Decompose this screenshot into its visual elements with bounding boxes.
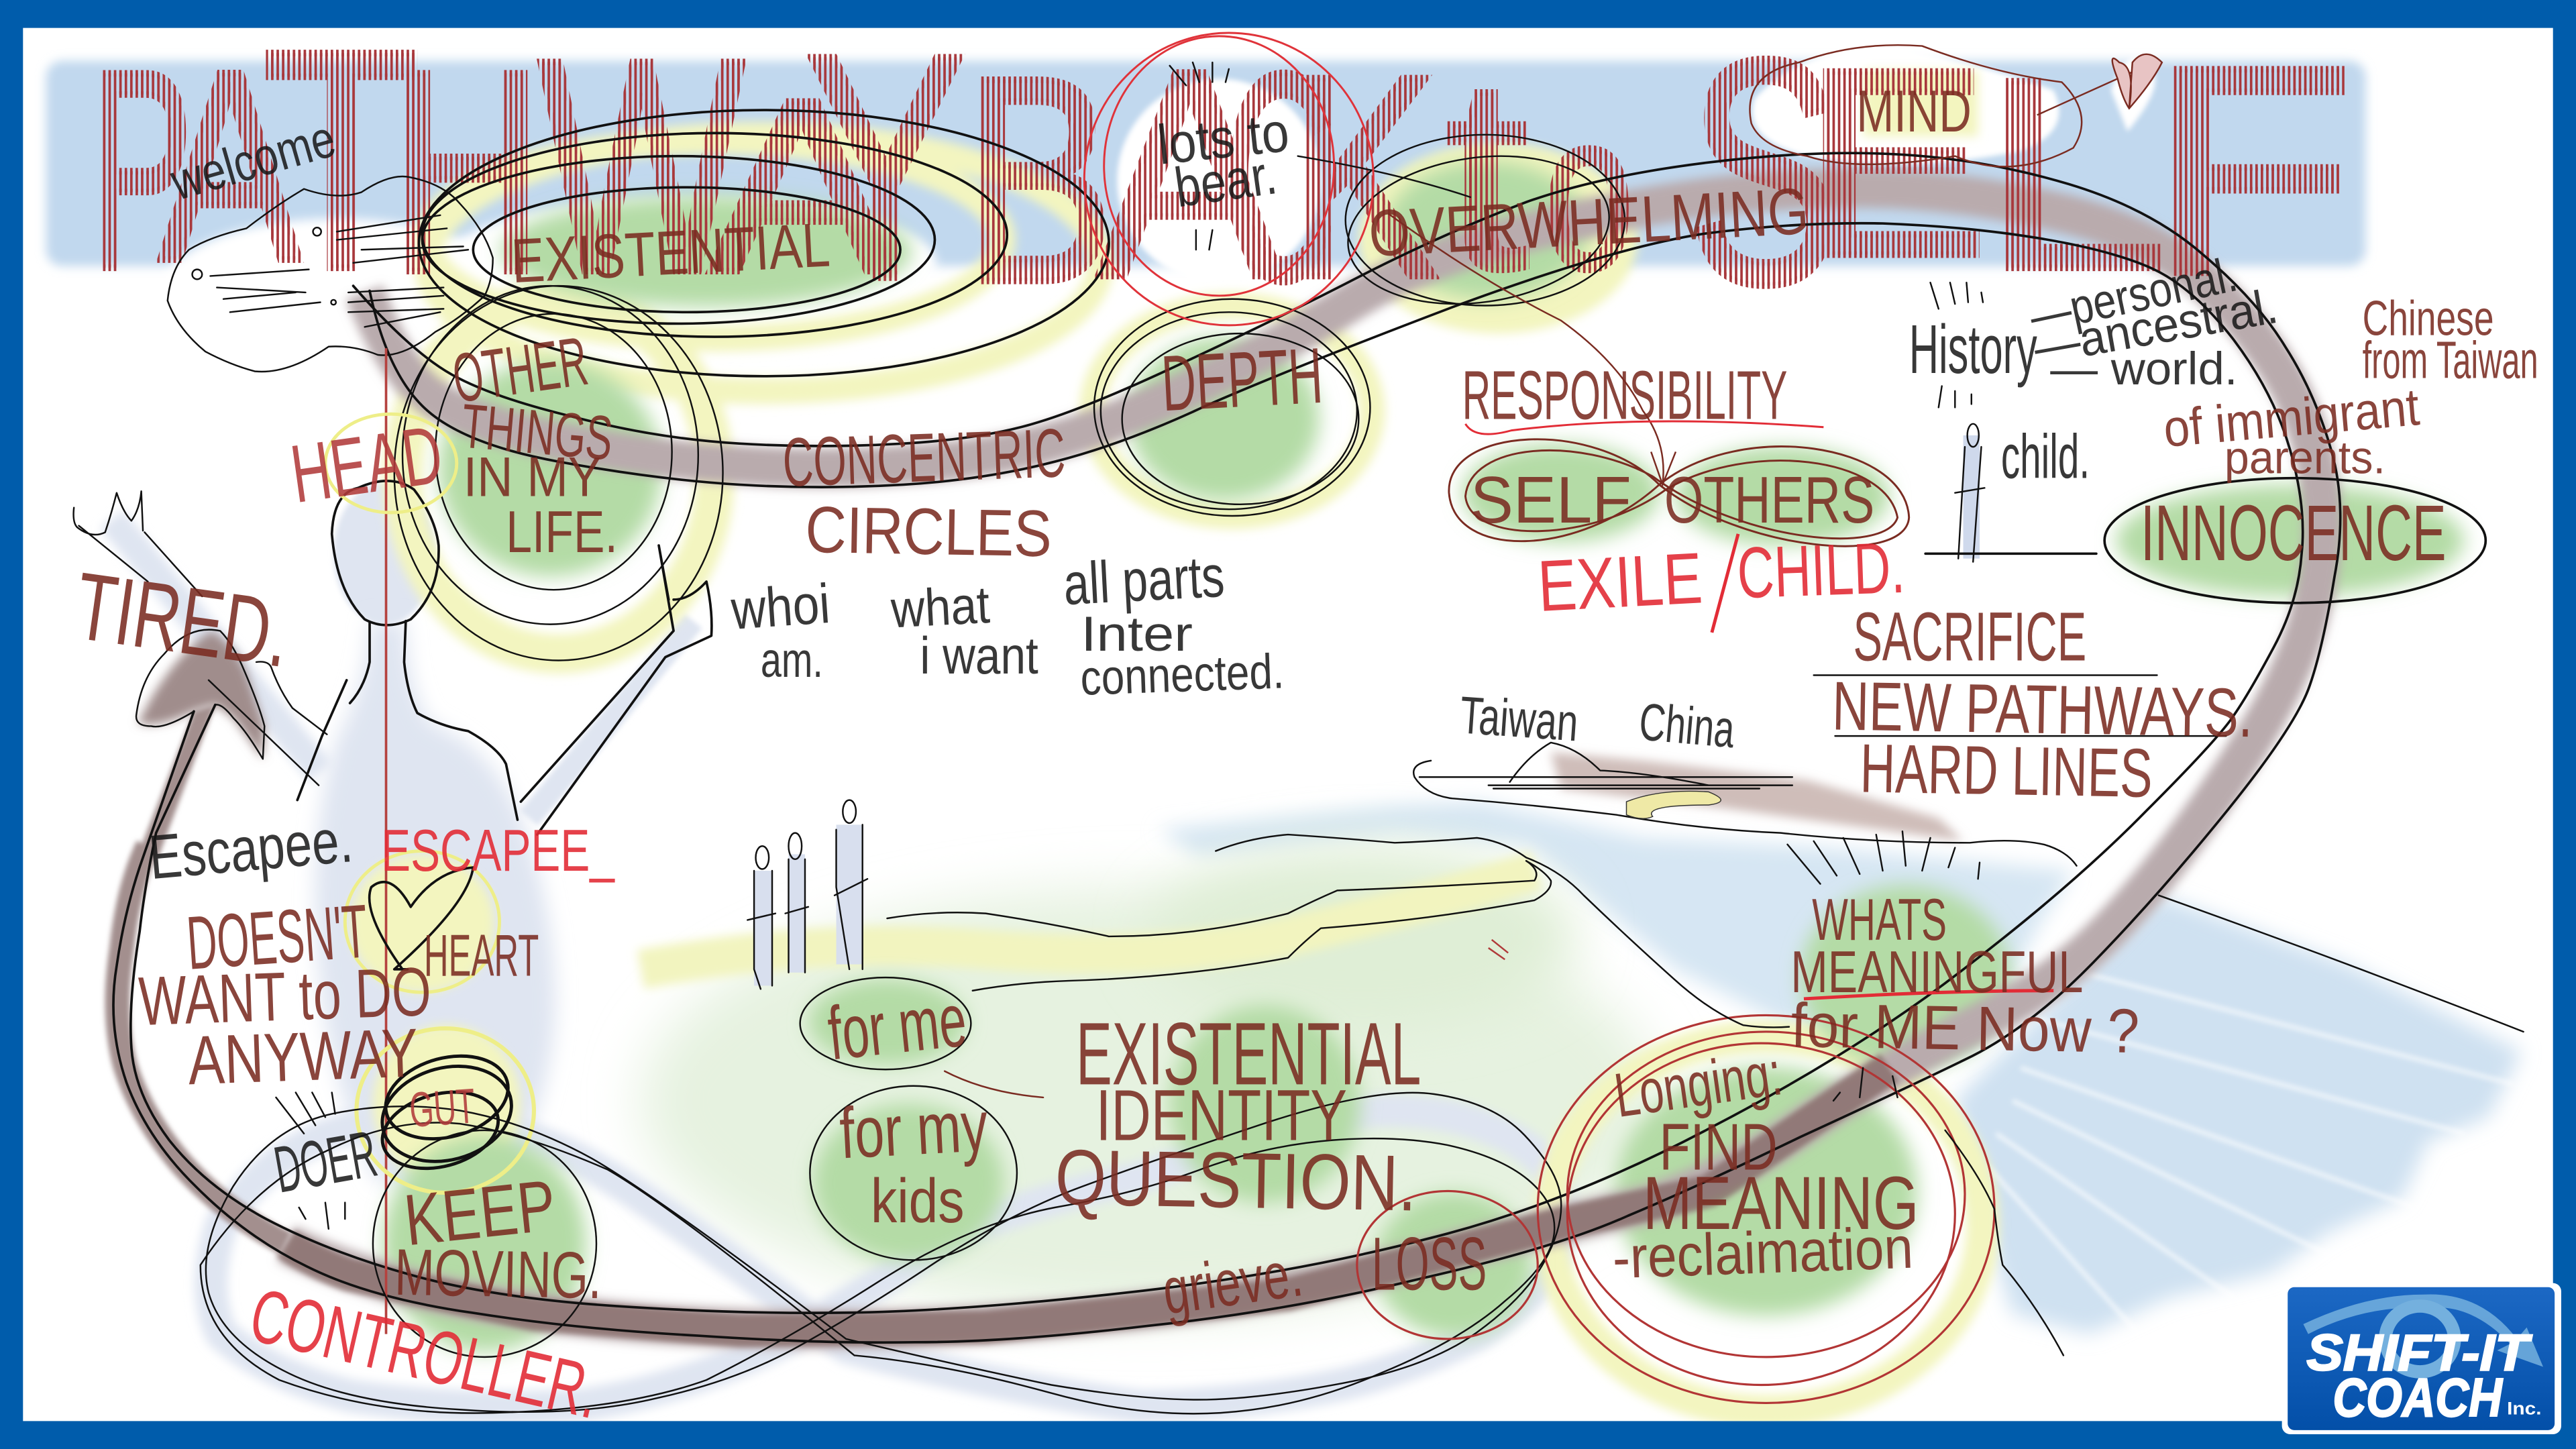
text: escapee black: Escapee. bbox=[146, 805, 356, 892]
text: self others: OTHERS bbox=[1664, 463, 1874, 537]
text: longing find meaning reclamation: FIND bbox=[1659, 1110, 1778, 1184]
title: C bbox=[1224, 12, 1336, 342]
text: overwhelming: OVERWHELMING bbox=[1367, 174, 1811, 270]
text: what i want bbox=[889, 575, 1038, 685]
overwhelming circles bbox=[1298, 135, 1625, 320]
text: exile child: CHILD. bbox=[1736, 527, 1906, 613]
text: responsibility: RESPONSIBILITY bbox=[1462, 356, 1787, 433]
text: existential identity question bbox=[1055, 1004, 1421, 1228]
text: of immigrant parents: of immigrant bbox=[2161, 377, 2422, 458]
text: concentric circles bbox=[782, 414, 1067, 570]
text: history: —ancestral. bbox=[2029, 278, 2282, 375]
title: B bbox=[963, 17, 1114, 343]
text: chinese from Taiwan: Chinese bbox=[2363, 290, 2494, 346]
text: loss: LOSS bbox=[1372, 1221, 1487, 1305]
text: whats meaningful for me now: WHATS bbox=[1812, 886, 1947, 953]
text: history: — world. bbox=[2050, 343, 2238, 394]
logo: Shift-It Coach bbox=[2282, 1283, 2561, 1434]
text: for my kids: kids bbox=[871, 1166, 965, 1236]
Taiwan and China sketch: China bbox=[1637, 692, 1737, 759]
head ring bbox=[325, 414, 457, 513]
text: other things in my life: THINGS bbox=[459, 390, 615, 474]
text: depth: DEPTH bbox=[1159, 331, 1325, 427]
text: longing find meaning reclamation: MEANING bbox=[1643, 1161, 1919, 1245]
text: doer: DOER bbox=[269, 1116, 382, 1207]
text: exile child bbox=[1536, 527, 1906, 633]
title: L bbox=[1980, 22, 2169, 325]
title: W bbox=[539, 0, 746, 336]
text: whats meaningful for me now: MEANINGFUL bbox=[1790, 938, 2083, 1005]
text: doesn't want to do anyway bbox=[138, 888, 433, 1099]
red find meaning rings bbox=[1357, 1015, 1994, 1403]
text: who i am: am. bbox=[761, 632, 823, 688]
title: A bbox=[1097, 9, 1283, 339]
text: keep moving bbox=[394, 1164, 602, 1312]
text: history bbox=[1909, 246, 2282, 407]
text: history: History bbox=[1909, 311, 2037, 388]
text: sacrifice new pathways hard lines: SACRIFICE bbox=[1853, 598, 2086, 675]
logo: Shift-It Coach: Inc. bbox=[2507, 1399, 2542, 1419]
text: all parts inter connected: connected. bbox=[1079, 643, 1285, 706]
text: other things in my life bbox=[448, 322, 618, 565]
arrow head bbox=[136, 630, 319, 786]
title bbox=[91, 0, 2354, 351]
text: all parts inter connected bbox=[1062, 543, 1285, 706]
landscape land wash bbox=[641, 846, 1659, 1314]
text: chinese from Taiwan bbox=[2363, 290, 2538, 389]
text: child: child. bbox=[2001, 422, 2090, 492]
text: longing find meaning reclamation: -reclaimation bbox=[1611, 1214, 1914, 1291]
title sky band bbox=[46, 48, 2366, 356]
text: whats meaningful for me now bbox=[1790, 886, 2140, 1066]
meaningful red underline bbox=[1804, 991, 2053, 999]
yellow filled spots bbox=[350, 70, 1978, 1183]
text: history: —personal. bbox=[2025, 246, 2242, 344]
text: for my kids bbox=[838, 1085, 989, 1236]
title: F bbox=[2149, 6, 2354, 336]
text: existential identity question: QUESTION. bbox=[1055, 1133, 1417, 1228]
text: what i want: what bbox=[889, 575, 991, 639]
depth circles bbox=[1094, 299, 1370, 516]
welcome cloud bbox=[164, 109, 493, 372]
logo: Shift-It Coach: SHIFT-IT bbox=[2306, 1324, 2532, 1381]
landscape coast and river lines bbox=[887, 761, 2524, 1355]
text: all parts inter connected: all parts bbox=[1062, 543, 1226, 617]
text: of immigrant parents bbox=[2161, 377, 2422, 483]
mind cloud and heart bbox=[1750, 45, 2162, 166]
text: tired: TIRED. bbox=[69, 552, 296, 688]
title: E bbox=[1804, 15, 1988, 312]
text: concentric circles: CONCENTRIC bbox=[782, 414, 1067, 501]
text: existential identity question: EXISTENTIAL bbox=[1076, 1004, 1421, 1104]
text: exile child: EXILE bbox=[1536, 537, 1704, 627]
text: all parts inter connected: Inter bbox=[1081, 606, 1193, 661]
text: of immigrant parents: parents. bbox=[2224, 431, 2385, 483]
text: other things in my life: OTHER bbox=[448, 322, 592, 417]
self others infinity bbox=[1449, 439, 1909, 546]
lavender infinity band bbox=[211, 1110, 1560, 1407]
child figure bbox=[1925, 424, 2096, 562]
pathway edge lines bbox=[113, 153, 2341, 1342]
water areas bbox=[1159, 802, 2522, 1334]
logo: Shift-It Coach: COACH bbox=[2333, 1368, 2503, 1428]
text: who i am: whoi bbox=[729, 572, 832, 641]
text: sacrifice new pathways hard lines bbox=[1831, 598, 2253, 812]
three people bbox=[747, 800, 867, 989]
pathway band bbox=[117, 189, 2322, 1331]
text: gut: GUT bbox=[408, 1077, 477, 1138]
text: doer bbox=[269, 1093, 382, 1229]
meaningful rays bbox=[1787, 831, 1980, 1101]
text: for me: for me bbox=[824, 977, 970, 1075]
text: existential: EXISTENTIAL bbox=[510, 209, 832, 296]
infinity outline bbox=[201, 1093, 1561, 1413]
text: concentric circles: CIRCLES bbox=[805, 492, 1053, 570]
text: keep moving: KEEP bbox=[400, 1164, 559, 1260]
title: A bbox=[160, 14, 302, 317]
mind cloud and heart: MIND bbox=[1856, 78, 1972, 144]
Taiwan and China sketch bbox=[1419, 685, 1792, 818]
text: who i am bbox=[729, 572, 832, 688]
text: doesn't want to do anyway: ANYWAY bbox=[186, 1014, 419, 1099]
green blobs bbox=[383, 161, 2464, 1352]
title: H bbox=[391, 11, 542, 332]
title: S bbox=[1689, 0, 1840, 351]
yellow halos bbox=[402, 135, 1983, 1411]
title: o bbox=[1544, 68, 1633, 315]
lots to bear text: bear. bbox=[1171, 143, 1281, 219]
welcome cloud: welcome bbox=[164, 109, 341, 211]
raised hand lines bbox=[74, 491, 202, 596]
text: sacrifice new pathways hard lines: HARD LINES bbox=[1860, 729, 2153, 812]
gut scribble and ring bbox=[356, 1028, 534, 1193]
text: other things in my life: IN MY bbox=[464, 446, 601, 508]
text: longing find meaning reclamation bbox=[1611, 1038, 1919, 1291]
lots to bear circles bbox=[1084, 33, 1373, 325]
title: A bbox=[710, 48, 895, 323]
text: self others: SELF bbox=[1470, 463, 1631, 537]
text: sacrifice new pathways hard lines: NEW PATHWAYS. bbox=[1831, 667, 2253, 751]
text: doesn't want to do anyway: WANT to DO bbox=[138, 953, 433, 1040]
lots to bear text bbox=[1155, 62, 1292, 250]
innocence ellipse bbox=[2104, 478, 2485, 603]
Taiwan and China sketch: Taiwan bbox=[1458, 685, 1580, 753]
text: escapee red: ESCAPEE_ bbox=[381, 817, 615, 883]
text: other things in my life: LIFE. bbox=[506, 498, 618, 565]
existential concentric circles bbox=[419, 110, 1109, 376]
title: K bbox=[1289, 15, 1438, 337]
small scribble mark bbox=[1489, 940, 1508, 959]
red responsibility underline bbox=[1465, 421, 1823, 434]
other things circles bbox=[394, 286, 723, 660]
text: what i want: i want bbox=[920, 626, 1038, 685]
text: for my kids: for my bbox=[838, 1085, 989, 1173]
lots to bear text: lots to bbox=[1155, 101, 1292, 176]
text: self others bbox=[1470, 463, 1874, 537]
body center line bbox=[386, 348, 387, 1334]
text: heart: HEART bbox=[424, 922, 539, 989]
responsibility connector bbox=[1388, 213, 1676, 484]
title: P bbox=[91, 13, 193, 328]
for me and for my kids circles bbox=[800, 977, 1043, 1260]
title: t bbox=[1446, 22, 1529, 325]
figure body wash bbox=[112, 483, 693, 1183]
text: longing find meaning reclamation: Longing: bbox=[1611, 1038, 1786, 1130]
text: grieve: grieve. bbox=[1158, 1236, 1307, 1328]
Taiwan strait shading bbox=[1551, 753, 1964, 841]
heart icon and ring bbox=[345, 851, 499, 992]
text: doesn't want to do anyway: DOESN'T bbox=[184, 888, 370, 985]
dividers for new pathways bbox=[1814, 676, 2226, 736]
figure outline bbox=[256, 481, 712, 835]
text: keep moving: MOVING. bbox=[394, 1235, 602, 1312]
keep moving circle bbox=[373, 1130, 596, 1357]
text: whats meaningful for me now: for ME Now ? bbox=[1790, 990, 2140, 1066]
text: head: HEAD bbox=[285, 408, 448, 520]
text: existential identity question: IDENTITY bbox=[1095, 1075, 1347, 1156]
